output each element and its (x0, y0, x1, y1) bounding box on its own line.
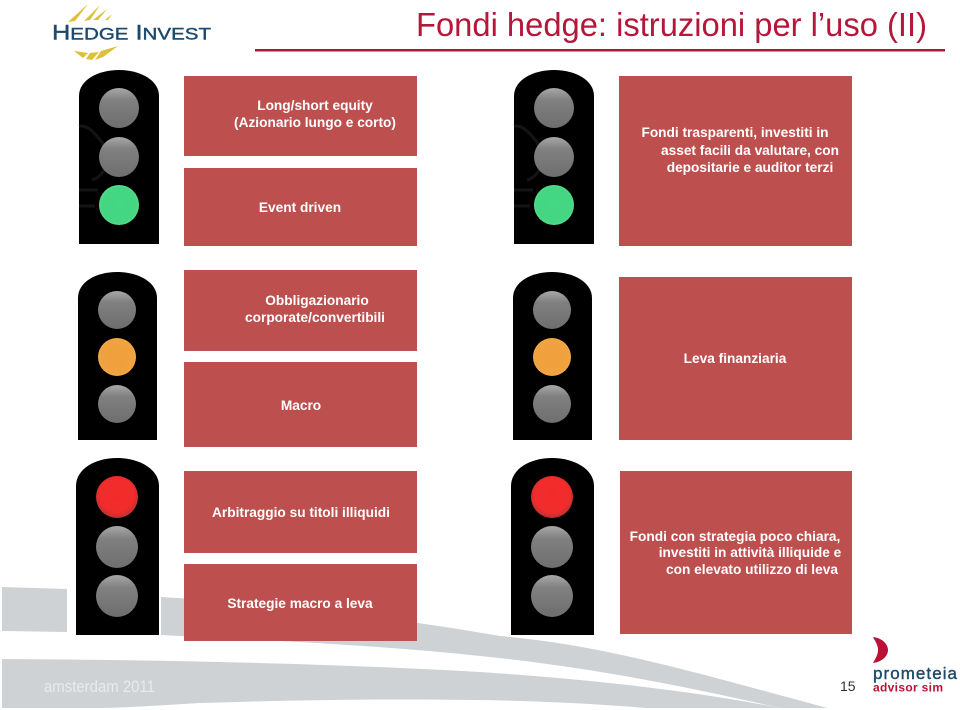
panel: Long/short equity (184, 76, 417, 156)
panel: Fondi trasparenti: depositarie e auditor terzi (667, 160, 833, 175)
panel: Strategie macro a leva (184, 564, 417, 641)
panel: Fondi trasparenti: asset facili da valutare, con (661, 143, 839, 158)
traffic light: red, row 3 right (511, 458, 594, 635)
panel: Fondi con strategia poco chiara (620, 471, 852, 634)
logo: Hedge Invest: HEDGE INVEST (52, 22, 211, 44)
panel: Event driven: Event driven (259, 200, 341, 215)
panel: Long/short equity: Long/short equity (257, 98, 373, 113)
panel: Leva finanziaria: Leva finanziaria (684, 351, 787, 366)
panel: Macro: Macro (281, 398, 321, 413)
logo: Prometeia advisor sim (873, 637, 958, 694)
traffic light: amber, row 2 right (513, 272, 592, 440)
logo: Prometeia advisor sim: prometeia (873, 664, 958, 683)
footer label: amsterdam 2011: amsterdam 2011 (44, 677, 155, 696)
panel: Event driven (184, 168, 417, 246)
panel: Fondi trasparenti: Fondi trasparenti, investiti in (641, 125, 829, 140)
traffic light: red, row 3 left (76, 458, 159, 635)
panel: Long/short equity: (Azionario lungo e corto) (234, 115, 396, 130)
traffic light: green, row 1 left (79, 70, 159, 244)
page number: 15 (840, 678, 856, 694)
panel: Obbligazionario corporate/convertibili: Obbligazionario (265, 293, 369, 308)
panel: Fondi trasparenti (619, 76, 852, 246)
background swooshes (2, 587, 827, 708)
title: Fondi hedge: istruzioni per l’uso (II) (416, 6, 927, 43)
traffic light: amber, row 2 left (78, 272, 157, 440)
logo: Prometeia advisor sim: advisor sim (873, 680, 943, 694)
panel: Arbitraggio su titoli illiquidi (184, 471, 417, 553)
panel: Obbligazionario corporate/convertibili (184, 270, 417, 351)
panel: Arbitraggio su titoli illiquidi: Arbitraggio su titoli illiquidi (212, 505, 390, 520)
panel: Macro (184, 362, 417, 447)
panel: Strategie macro a leva: Strategie macro a leva (227, 596, 373, 611)
panel: Fondi con strategia poco chiara: investiti in attività illiquide e (659, 545, 842, 560)
panel: Obbligazionario corporate/convertibili: corporate/convertibili (245, 310, 385, 325)
logo: Hedge Invest (52, 4, 211, 60)
title rule (255, 49, 945, 52)
panel: Fondi con strategia poco chiara: con elevato utilizzo di leva (666, 562, 838, 577)
traffic light: green, row 1 right (514, 70, 594, 244)
panel: Leva finanziaria (619, 277, 852, 440)
panel: Fondi con strategia poco chiara: Fondi con strategia poco chiara, (630, 529, 840, 544)
